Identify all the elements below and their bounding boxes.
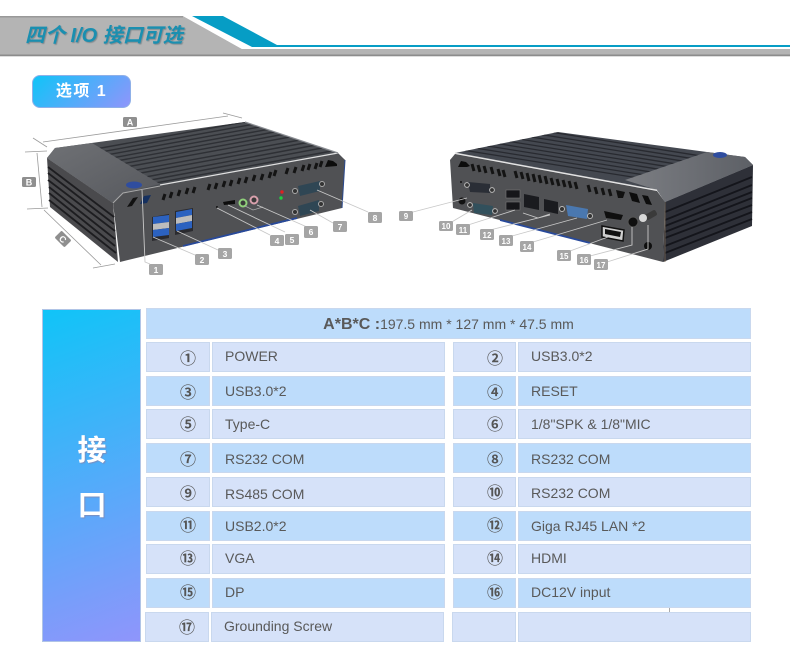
row 7 [146, 544, 751, 574]
top face [47, 121, 345, 203]
callout numbers 1-8: 4 [275, 236, 280, 246]
row 7: ⑭ [487, 545, 503, 569]
row 1: ① [180, 345, 196, 369]
row 3: ⑤ [180, 411, 196, 435]
row 5: ⑩ [487, 479, 503, 503]
row 5 [146, 477, 751, 507]
row 6: ⑪ [180, 512, 196, 536]
dimensions row: A*B*C :197.5 mm * 127 mm * 47.5 mm [323, 316, 574, 333]
row 4 [146, 443, 751, 473]
side label panel: interfaces [42, 309, 141, 642]
dimension label C: C [57, 234, 69, 246]
row 7: HDMI [531, 550, 567, 566]
callout numbers 9-17 [399, 211, 608, 270]
callout lines [413, 198, 648, 262]
row 1: USB3.0*2 [531, 348, 592, 364]
COM ports [292, 181, 324, 216]
row 8: ⑮ [180, 579, 196, 603]
right side face [663, 165, 753, 262]
callout numbers 1-8 [149, 212, 382, 275]
section header banner [0, 16, 790, 57]
front face [113, 154, 345, 262]
row 6 [146, 511, 751, 541]
row 4: RS232 COM [225, 451, 304, 467]
row 6: Giga RJ45 LAN *2 [531, 518, 645, 534]
row 2: ④ [487, 379, 503, 403]
callout numbers 1-8: 7 [338, 222, 343, 232]
dimension label A: A [127, 118, 134, 128]
USB ports [152, 208, 193, 241]
rear ports [458, 181, 658, 250]
row 3: Type-C [225, 416, 270, 432]
callout numbers 1-8: 2 [200, 255, 205, 265]
callout numbers 9-17: 12 [483, 231, 492, 240]
callout numbers 1-8: 6 [309, 227, 314, 237]
callout numbers 1-8: 1 [154, 265, 159, 275]
row 3 [146, 409, 751, 439]
option 1 button [32, 75, 131, 108]
callout numbers 9-17: 9 [404, 212, 409, 221]
dimension label A [123, 117, 137, 128]
row 9: ⑰ [179, 614, 195, 638]
dimension label B: B [26, 178, 33, 188]
dimension and callout lines [25, 113, 242, 268]
audio, type-c and LED ports [216, 190, 284, 210]
option 1 button: 选项 1 [56, 83, 107, 100]
callout numbers 1-8: 5 [290, 235, 295, 245]
banner title: 四个 I/O 接口可选 [25, 25, 183, 47]
row 5: ⑨ [180, 480, 196, 504]
callout numbers 9-17: 11 [459, 226, 468, 235]
callout numbers 1-8: 8 [373, 213, 378, 223]
callout numbers 9-17: 17 [597, 261, 606, 270]
row 8: DC12V input [531, 584, 610, 600]
callout numbers 1-8: 3 [223, 249, 228, 259]
row 2 [146, 376, 751, 406]
row 6: ⑫ [487, 512, 503, 536]
row 4: RS232 COM [531, 451, 610, 467]
product photo: front view with callouts [22, 112, 382, 275]
row 4: ⑧ [487, 446, 503, 470]
side label character: 口: 口 [77, 490, 106, 522]
row 1 [146, 342, 751, 372]
row 3: ⑥ [487, 411, 503, 435]
row 2: ③ [180, 379, 196, 403]
row 2: RESET [531, 383, 578, 399]
top face [455, 132, 753, 202]
row 9: Grounding Screw [224, 618, 332, 634]
left side face [47, 158, 118, 262]
row 8 [146, 578, 751, 608]
dimension label C [54, 231, 71, 248]
row 8: ⑯ [487, 579, 503, 603]
rear face [450, 154, 665, 262]
product photo: rear view with callouts [399, 132, 753, 270]
row 1: ② [487, 345, 503, 369]
row 7: ⑬ [180, 545, 196, 569]
row 1: POWER [225, 348, 278, 364]
row 9 [145, 612, 751, 642]
row 5: RS485 COM [225, 486, 304, 502]
callout numbers 9-17: 15 [560, 252, 569, 261]
dimension label B [22, 177, 36, 188]
callout numbers 9-17: 14 [523, 243, 532, 252]
callout numbers 9-17: 16 [580, 256, 589, 265]
dimensions row [146, 308, 751, 339]
row 6: USB2.0*2 [225, 518, 286, 534]
row 5: RS232 COM [531, 485, 610, 501]
callout numbers 9-17: 10 [442, 222, 451, 231]
row 7: VGA [225, 550, 255, 566]
row 8: DP [225, 584, 244, 600]
callout numbers 9-17: 13 [502, 237, 511, 246]
row 4: ⑦ [180, 446, 196, 470]
side label character: 接: 接 [77, 435, 106, 467]
row 2: USB3.0*2 [225, 383, 286, 399]
row 3: 1/8"SPK & 1/8"MIC [531, 416, 651, 432]
